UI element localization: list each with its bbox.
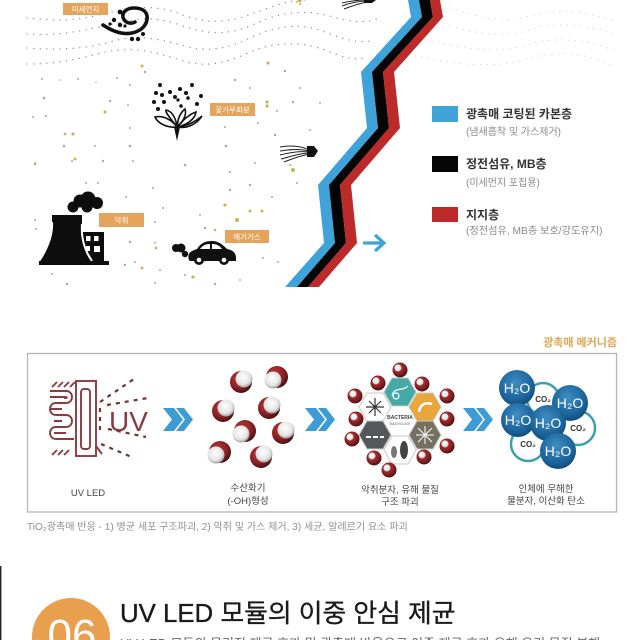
legend: carbon layer xyxy=(432,106,572,138)
badge: 06 xyxy=(32,598,110,640)
icon: pollen flower xyxy=(152,83,203,141)
legend: support layer: 지지층 xyxy=(466,208,499,222)
left page edge line xyxy=(0,566,1,640)
legend: support layer xyxy=(432,207,602,237)
arrow: chevrons 1 xyxy=(163,408,193,431)
label: hydroxyl xyxy=(227,483,269,507)
section title: UV LED 모듈의 이중 안심 제균 xyxy=(120,599,455,628)
icon: UV LED xyxy=(50,379,148,458)
label: exhaust gas: 배기가스 xyxy=(233,232,261,242)
layer: carbon blue xyxy=(285,0,422,287)
layer: red support xyxy=(308,0,443,287)
layer: black fibre xyxy=(297,0,433,287)
icon: car xyxy=(172,241,236,265)
diagram: water and CO2: CO₂ xyxy=(570,424,586,433)
label: pollen: 꽃가루화분 xyxy=(215,106,250,114)
label: odor xyxy=(99,213,144,227)
molecules: hydroxyl xyxy=(208,366,294,468)
diagram: water and CO2: H₂O xyxy=(505,412,531,428)
label: fine dust: 미세먼지 xyxy=(72,4,99,14)
diagram: water and CO2: H₂O xyxy=(504,380,530,396)
label: structure destruction: 악취분자, 유해 물질 xyxy=(361,484,439,496)
label: hydroxyl: (-OH)형성 xyxy=(227,496,269,507)
label: fine dust xyxy=(63,3,108,15)
diagram: water and CO2: CO₂ xyxy=(535,395,551,404)
icon: comet middle xyxy=(280,146,318,162)
label: hydroxyl: 수산화기 xyxy=(231,483,265,494)
legend: fibre layer: 정전섬유, MB층 xyxy=(466,157,547,171)
diagram: bacteria hexagons: BACTERIA xyxy=(387,415,413,421)
diagram: water and CO2 xyxy=(499,370,595,469)
diagram: water and CO2: H₂O xyxy=(535,415,561,431)
arrow: air out xyxy=(363,235,384,251)
label: structure destruction: 구조 파괴 xyxy=(381,497,419,508)
icon: UV LED: UV xyxy=(109,406,148,437)
diagram: bacteria hexagons: MACROLIDE xyxy=(390,422,411,426)
icon: factory xyxy=(39,192,109,265)
dust speckles xyxy=(32,70,321,285)
diagram: water and CO2: CO₂ xyxy=(520,440,536,449)
label: pollen xyxy=(210,103,255,116)
label: structure destruction xyxy=(361,484,439,508)
legend: fibre layer xyxy=(432,156,547,189)
panel: mechanism xyxy=(28,354,616,512)
caption: TiO₂광촉매 반응 - 1) 병균 세포 구조파괴, 2) 악취 및 가스 제거, 3) 세균, 알레르기 요소 파괴 xyxy=(27,521,408,533)
dotted air-flow waves xyxy=(27,0,380,64)
diagram: water and CO2: H₂O xyxy=(545,443,571,459)
legend: carbon layer: (냄새흡착 및 가스제거) xyxy=(466,125,561,138)
label: exhaust gas xyxy=(225,230,269,243)
icon: dust spiral xyxy=(103,8,147,41)
arrow: chevrons 2 xyxy=(305,408,335,431)
filter layers band xyxy=(285,0,443,287)
label: harmless: 인체에 무해한 xyxy=(518,483,574,495)
legend: carbon layer: 광촉매 코팅된 카본층 xyxy=(466,106,572,121)
label: harmless: 물분자, 이산화 탄소 xyxy=(507,496,585,507)
legend: support layer: (정전섬유, MB층 보호/강도유지) xyxy=(466,225,602,237)
legend: fibre layer: (미세먼지 포집용) xyxy=(466,177,540,189)
heading: mechanism: 광촉매 메커니즘 xyxy=(543,335,617,349)
label: odor: 악취 xyxy=(115,215,128,225)
arrow: chevrons 3 xyxy=(463,408,493,431)
label: harmless xyxy=(507,483,585,507)
icon: comet top xyxy=(342,0,376,9)
diagram: bacteria hexagons xyxy=(344,362,454,478)
diagram: water and CO2: H₂O xyxy=(557,395,583,411)
label: UV LED: UV LED xyxy=(71,488,105,499)
